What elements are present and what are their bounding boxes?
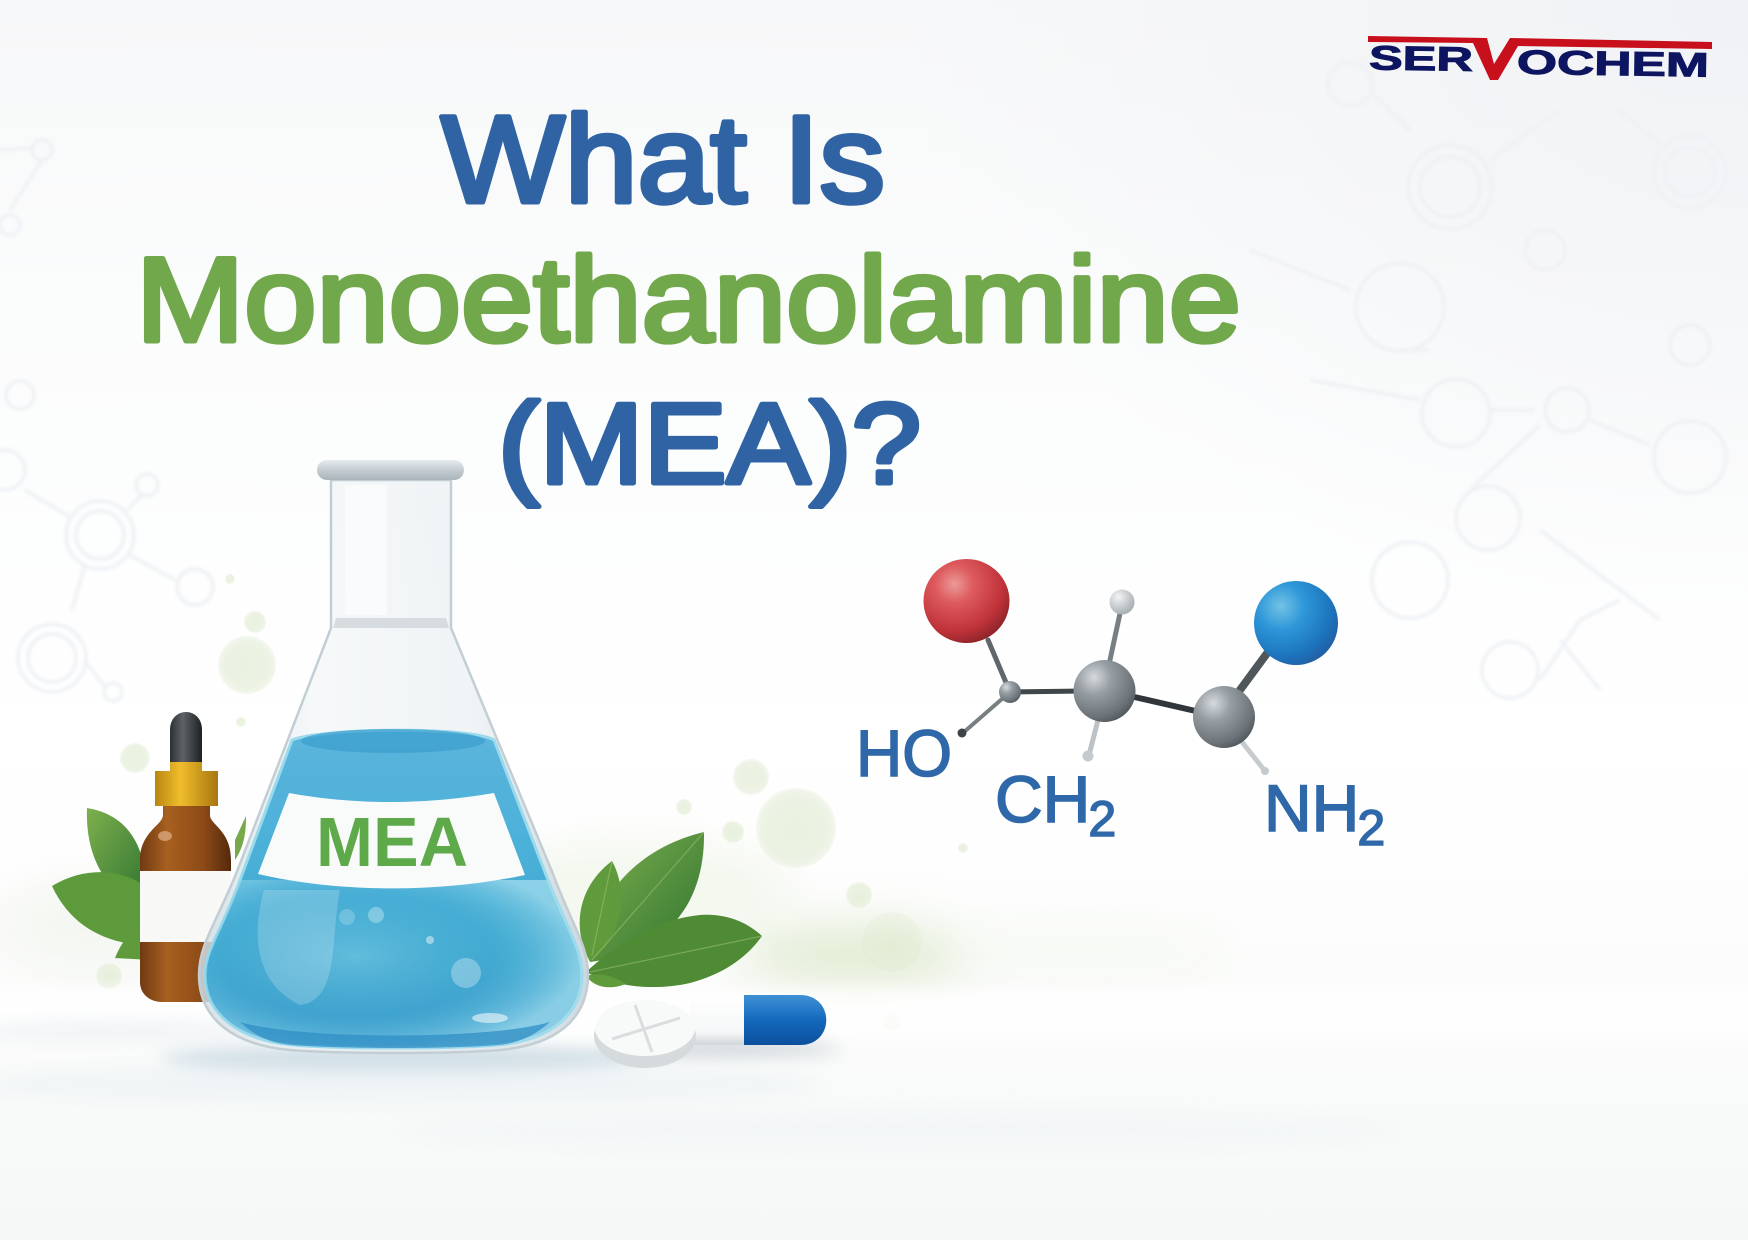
flask label bbox=[258, 793, 525, 888]
molecule model bbox=[924, 559, 1338, 775]
right leaves bbox=[580, 832, 762, 987]
bottle label bbox=[140, 871, 231, 942]
flask glass bbox=[199, 480, 588, 1053]
label CH2: CH bbox=[995, 762, 1090, 836]
bonds bbox=[964, 604, 1268, 771]
label HO: HO bbox=[856, 716, 952, 790]
floor bbox=[0, 990, 1748, 1148]
title line 2: Monoethanolamine bbox=[136, 233, 1241, 367]
flask rim bbox=[317, 460, 464, 480]
molecule labels bbox=[856, 716, 1385, 856]
carbon atoms bbox=[999, 660, 1255, 748]
liquid surface bbox=[301, 729, 485, 753]
pills bbox=[594, 995, 826, 1068]
left glass highlight bbox=[258, 890, 340, 1005]
logo wordmark: OCHEM bbox=[1517, 44, 1709, 85]
tablet bbox=[594, 1000, 696, 1068]
label CH2: 2 bbox=[1088, 791, 1116, 847]
logo wordmark bbox=[1369, 39, 1709, 85]
logo wordmark: SER bbox=[1369, 39, 1473, 79]
bubbles bbox=[96, 574, 968, 1030]
logo: Servochem bbox=[1368, 36, 1712, 85]
Erlenmeyer flask bbox=[199, 460, 588, 1053]
neck highlight bbox=[345, 485, 387, 615]
liquid bbox=[205, 730, 582, 1048]
label NH2: 2 bbox=[1357, 800, 1385, 856]
logo red V stroke bbox=[1368, 36, 1712, 80]
capsule bbox=[690, 995, 826, 1045]
neck shoulder tint bbox=[333, 618, 449, 628]
background molecular pattern bbox=[0, 62, 1726, 701]
dropper bulb bbox=[170, 712, 202, 764]
title bbox=[136, 91, 1241, 508]
amber dropper bottle bbox=[140, 712, 231, 1002]
gold collar bbox=[155, 762, 218, 806]
bottle highlight bbox=[158, 831, 172, 841]
oxygen atom bbox=[924, 559, 1010, 643]
label NH2: NH bbox=[1264, 771, 1359, 845]
title line 1: What Is bbox=[441, 91, 885, 229]
liquid bottom shade bbox=[240, 1022, 550, 1048]
leaves behind bottle bbox=[52, 808, 246, 960]
liquid glow bbox=[205, 880, 582, 1048]
title line 3: (MEA)? bbox=[498, 381, 921, 508]
bottle body bbox=[140, 806, 231, 1002]
label text MEA: MEA bbox=[316, 803, 468, 881]
glare spots bbox=[339, 907, 508, 1023]
hydrogen atoms bbox=[958, 590, 1269, 775]
nitrogen atom bbox=[1254, 581, 1338, 665]
green mist bbox=[0, 845, 1230, 985]
